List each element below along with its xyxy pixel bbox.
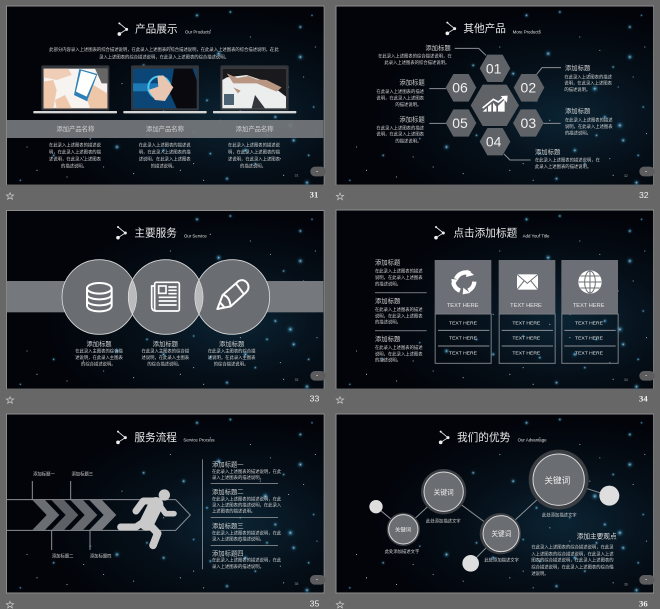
title: Service Process [183, 438, 215, 443]
step 3: 添加标题三 [212, 521, 244, 530]
label 06: 添加标题 [399, 78, 425, 87]
title: 服务流程 [134, 431, 177, 444]
step 1: 在此录入上述图表的描述说明，在此 [212, 468, 282, 475]
product text 2: 在此录入上述图表的描述说 [139, 142, 191, 149]
product text 1: 述说明，在此录入上述图表 [49, 155, 102, 162]
label 05: 在此录入上述图表的描述 [376, 124, 425, 131]
step 4: 添加标题四 [212, 549, 244, 558]
arrow labels: 添加标题一 [33, 471, 55, 478]
circles [62, 260, 270, 334]
nav tab [639, 167, 655, 176]
step 3 [211, 521, 282, 546]
label 02: 的描述说明。 [564, 86, 590, 93]
label 03: 在此录入上述图表的描述 [565, 117, 613, 124]
product image: documents [33, 65, 117, 113]
card 3 globe: TEXT HERE [575, 351, 604, 357]
left item 1: 添加标题 [375, 258, 401, 267]
product image: digital hand [123, 65, 207, 113]
label 02: 在此录入上述图表的描述 [564, 73, 613, 80]
product text 2: 的描述说明。 [151, 162, 177, 169]
left item 3 [375, 334, 423, 364]
product text 3: 明，在此录入上述图表的描 [228, 148, 281, 155]
card 1 recycle [435, 260, 491, 363]
main point text: 在此录入上述图表的综合描述说明，在此录 [531, 544, 614, 551]
product text 1 [49, 142, 102, 169]
product names: 添加产品名称 [56, 124, 95, 133]
title: Our Advantage [518, 438, 547, 443]
step 2: 添加标题二 [212, 487, 244, 496]
footer star icon [6, 193, 14, 199]
slide number small: 31 [295, 174, 299, 178]
hexagon 06: 06 [452, 80, 468, 96]
title: Our Products [185, 29, 210, 34]
left item 2: 在此录入上述图表的描述 [375, 306, 423, 313]
footer star icon [6, 601, 14, 608]
step 2 [211, 487, 282, 518]
step 1: 录入上述图表的描述说明。 [212, 474, 264, 481]
icon: running figure [121, 489, 174, 545]
footer number: 36 [639, 598, 648, 608]
label 03: 说明，在此录入上述图表 [565, 123, 613, 130]
band [7, 120, 323, 138]
service 3 text: 的综合描述说明。 [214, 361, 248, 368]
footer star icon [6, 397, 14, 403]
step 2: 录入上述图表的描述说明，在此录入 [212, 501, 282, 508]
main point text: 添加主要观点 [577, 532, 617, 541]
step 2: 上述图表的描述说明。 [212, 507, 255, 514]
arrow labels [32, 471, 111, 560]
large keyword circle: 关键词 [544, 474, 570, 485]
footer number: 31 [310, 190, 318, 200]
label 02: 添加标题 [565, 63, 591, 72]
gray dots [369, 486, 619, 572]
arrow outline [7, 500, 190, 530]
product text 2 [139, 142, 191, 169]
service 1 text [75, 339, 123, 368]
hexagon 04: 04 [486, 134, 502, 150]
label 03: 添加标题 [565, 106, 591, 115]
step 4: 录入上述图表的描述说明。 [212, 563, 264, 570]
slide number small: 34 [624, 378, 628, 382]
label 06: 的描述说明。 [395, 101, 421, 108]
step 4 [212, 549, 282, 570]
main point text [531, 532, 617, 577]
keyword circle 1 [387, 513, 420, 546]
card 3 globe: TEXT HERE [575, 336, 604, 342]
keyword circle 2 [421, 469, 466, 514]
label 06: 说明，在此录入上述图表 [376, 95, 425, 102]
product names: 添加产品名称 [236, 124, 274, 133]
product text 2: 述说明，在此录入上述图表 [139, 155, 191, 162]
service 2 text: 在此录入主图表的综合描 [142, 348, 190, 355]
label 01: 在此录入上述图表的综合描述说明，在 [378, 53, 452, 60]
product text 1: 在此录入上述图表的描述说 [49, 142, 102, 149]
label 06 [376, 78, 425, 108]
slide number small: 32 [624, 174, 628, 178]
card 2 envelope [499, 260, 555, 363]
label 04 [535, 147, 601, 170]
service 2 text: 的综合描述说明。 [147, 361, 182, 368]
title: 主要服务 [134, 227, 177, 240]
left item 2: 添加标题 [375, 296, 401, 305]
title [434, 226, 550, 240]
center hexagon with chart icon [471, 85, 519, 126]
service 1 text: 述说明，在此录入主图表 [75, 354, 123, 361]
card 3 globe: TEXT HERE [575, 320, 604, 326]
label 04: 在此录入上述图表的描述说明，在 [535, 156, 601, 163]
product text 3: 述说明，在此录入上述图表 [228, 155, 281, 162]
keyword circle 2: 关键词 [434, 487, 454, 496]
service 1 text: 添加标题 [86, 339, 112, 348]
label 01: 此录入上述图表的综合描述说明。 [384, 59, 449, 66]
service 3 text: 在此录入主图表的综合描 [208, 348, 256, 355]
intro text [49, 46, 279, 60]
left item 1 [375, 258, 427, 293]
card 2 envelope: TEXT HERE [512, 351, 541, 357]
left item 3: 说明，在此录入上述图表 [375, 350, 423, 357]
hexagon 06 [446, 74, 476, 102]
card 2 envelope: TEXT HERE [512, 336, 541, 342]
product text 1: 明，在此录入上述图表的描 [49, 148, 102, 155]
step 3: 在此录入上述图表的描述说明，在此 [212, 530, 282, 537]
icon: newspaper [152, 282, 179, 311]
label 02: 说明，在此录入上述图表 [564, 80, 613, 87]
hexagon 03: 03 [521, 115, 536, 131]
panel: slide 34 add title [336, 210, 655, 404]
hexagon 05 [446, 109, 476, 137]
main point text: 入上述图表的综合描述说明，在此录入上述 [531, 550, 614, 557]
label 05: 说明，在此录入上述图表 [376, 131, 425, 138]
icon: database [87, 283, 112, 311]
title [116, 226, 207, 240]
label 05: 添加标题 [399, 115, 425, 124]
label 02 [564, 63, 613, 93]
title: 我们的优势 [457, 431, 511, 444]
footer number: 35 [310, 598, 319, 608]
title [439, 431, 547, 444]
step 4: 在此录入上述图表的描述说明，在此 [212, 557, 282, 564]
title [445, 22, 541, 35]
product text 3: 在此录入上述图表的描述说 [228, 142, 281, 149]
card 1 recycle: TEXT HERE [449, 351, 478, 357]
left item 1: 在此录入上述图表的描述 [375, 268, 423, 275]
keyword captions: 此处添加描述文字 [426, 517, 461, 524]
title: Add Your Title [523, 233, 550, 238]
panel: slide 33 main services [6, 210, 326, 404]
left item 2: 说明，在此录入上述图表 [375, 312, 423, 319]
left item 3: 在此录入上述图表的描述 [375, 344, 423, 351]
step 3: 录入上述图表的描述说明。 [212, 536, 264, 543]
card 1 recycle: TEXT HERE [449, 320, 478, 326]
connector lines [429, 48, 561, 160]
panel: slide 36 advantages [336, 414, 655, 608]
intro text: 此部分内容录入上述图表的综合描述说明，在此录入上述图表的综合描述说明，在此录入上述图表的综合描述说明，在此 [49, 46, 279, 53]
title [117, 22, 210, 36]
connector lines [376, 480, 609, 563]
arrow labels: 添加标题四 [90, 553, 111, 560]
step 1: 添加标题一 [212, 459, 244, 468]
product text 2: 明，在此录入上述图表的描 [139, 148, 191, 155]
vertical divider [201, 459, 204, 569]
label 04: 添加标题 [535, 147, 561, 156]
footer star icon [336, 397, 344, 403]
service 3 text: 添加标题 [219, 339, 245, 348]
slide number small: 36 [624, 582, 628, 586]
title: 产品展示 [135, 22, 178, 35]
left item 1: 说明，在此录入上述图表 [375, 274, 423, 281]
service 2 text [142, 339, 190, 368]
nav tab [310, 371, 326, 381]
product image: meeting [213, 65, 296, 113]
large keyword circle [529, 450, 589, 510]
hexagon 01: 01 [486, 60, 502, 76]
keyword captions: 此处添加描述文字 [385, 548, 420, 555]
band [7, 281, 323, 312]
footer number: 33 [310, 394, 319, 404]
nav tab [639, 575, 655, 585]
card 2 envelope: TEXT HERE [512, 320, 541, 326]
service 3 text: 述说明，在此录入主图表 [208, 354, 256, 361]
footer star icon [336, 601, 344, 608]
card 2 envelope: TEXT HERE [510, 303, 542, 309]
slide number small: 35 [295, 582, 299, 586]
service 1 text: 在此录入主图表的综合描 [75, 348, 123, 355]
nav tab [310, 575, 325, 585]
service 2 text: 添加标题 [153, 339, 179, 348]
title: Our Service [184, 233, 207, 238]
slide number small: 33 [295, 378, 299, 382]
hexagon 01 [480, 55, 510, 82]
label 01: 添加标题 [425, 43, 451, 52]
product names [56, 124, 274, 133]
footer star icon [336, 193, 344, 200]
title: 其他产品 [463, 22, 506, 35]
keyword captions [385, 511, 577, 563]
service 1 text: 的综合描述说明。 [81, 361, 116, 368]
step 2: 在此录入上述图表的描述说明，在此 [212, 496, 282, 503]
keyword captions: 此处添加描述文字 [484, 556, 520, 563]
service 2 text: 述说明，在此录入主图表 [142, 354, 190, 361]
keyword circle 3: 关键词 [491, 529, 512, 538]
arrow labels: 添加标题三 [72, 471, 94, 478]
nav tab [310, 167, 326, 176]
card 3 globe: TEXT HERE [573, 303, 605, 309]
panel: slide 35 service process [6, 414, 325, 608]
left item 3: 添加标题 [375, 334, 401, 343]
hexagon 02: 02 [521, 80, 536, 96]
hexagon 03 [513, 109, 544, 137]
service 3 text [208, 339, 256, 368]
title: More Products [513, 29, 541, 34]
card 1 recycle: TEXT HERE [447, 303, 479, 309]
hexagon 05: 05 [452, 115, 468, 131]
card 3 globe [561, 260, 618, 363]
label 03: 的描述说明。 [565, 129, 591, 136]
keyword circle 1: 关键词 [395, 525, 411, 533]
nav tab [639, 371, 655, 381]
left item 2 [375, 296, 427, 331]
main point text: 述说明。 [531, 570, 549, 577]
left item 3: 的描述说明。 [375, 357, 401, 364]
left item 1: 的描述说明。 [375, 280, 401, 287]
left item 2: 的描述说明。 [375, 319, 401, 326]
label 03 [565, 106, 613, 136]
panel: slide 32 other products [336, 6, 655, 200]
hexagon 04 [480, 128, 510, 155]
footer number: 32 [639, 190, 649, 200]
card 1 recycle: TEXT HERE [449, 336, 478, 342]
label 05: 的描述说明。 [395, 137, 421, 144]
label 01 [378, 43, 452, 66]
chevrons [32, 500, 116, 530]
footer number: 34 [639, 394, 648, 404]
main point text: 图表的综合描述说明，在此录入上述图表的 [531, 557, 614, 564]
title [116, 431, 215, 444]
hexagon 02 [514, 74, 544, 102]
label 05 [376, 115, 425, 144]
product text 3: 的描述说明。 [240, 162, 266, 169]
icon: pencil [217, 280, 249, 309]
keyword captions: 此处添加描述文字 [542, 511, 577, 518]
intro text: 录入上述图表的综合描述说明，在此录入上述图表的综合描述说明。 [99, 53, 229, 60]
label 06: 在此录入上述图表的描述 [376, 88, 425, 95]
panel: slide 31 products [6, 6, 326, 200]
arrow labels: 添加标题二 [52, 553, 74, 560]
product names: 添加产品名称 [146, 124, 185, 133]
label 04: 此录入上述图表的描述说明。 [535, 163, 591, 170]
main point text: 综合描述说明，在此录入上述图表的综合描 [531, 563, 614, 570]
product text 3 [228, 142, 281, 169]
product text 1: 的描述说明。 [61, 162, 87, 169]
title: 点击添加标题 [453, 227, 518, 240]
keyword circle 3 [480, 513, 521, 554]
step 1 [211, 459, 282, 484]
